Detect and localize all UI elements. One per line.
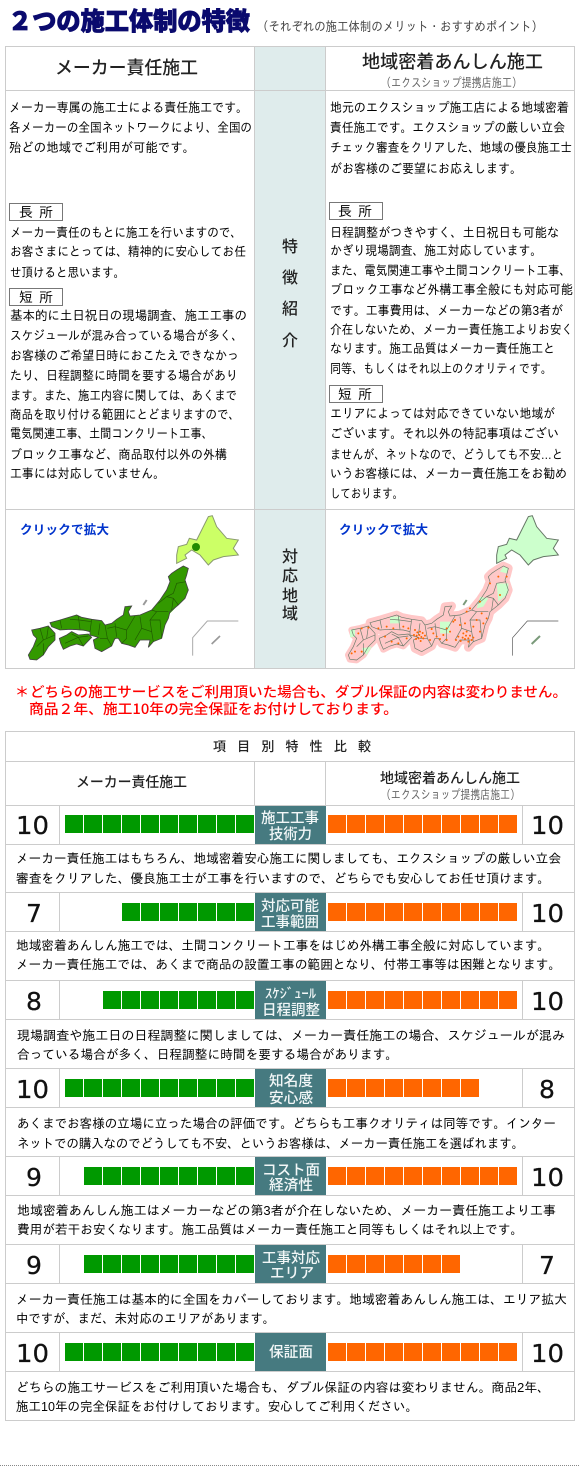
text block: cost: 費用が若干お安くなります。施工品質はメーカー責任施工と同等もしくはそれ以上です。 [17, 1222, 523, 1237]
text block: maker merit: お客さまにとっては、精神的に安心してお任 [10, 244, 246, 259]
text block: maker demerit: お客様のご希望日時におこたえできなかっ [10, 348, 239, 363]
text block: construction skill [16, 851, 561, 886]
text block: construction skill: メーカー責任施工はもちろん、地域密着安心施工に関しましても、エクスショップの厳しい立会 [16, 851, 561, 866]
text block: work range [16, 938, 561, 972]
badge: maker merit: 長 所 [19, 204, 53, 220]
badge: local demerit: 短 所 [338, 386, 372, 402]
text block: maker demerit: スケジュールが混み合っている場合が多く、 [10, 328, 243, 343]
row: cost: 10 [531, 1163, 564, 1192]
row: name recognition [16, 1069, 555, 1108]
text block: local merit: 日程調整がつきやすく、土日祝日も可能な [330, 225, 559, 240]
badge: local demerit [330, 386, 382, 402]
row: work range: 7 [26, 899, 42, 928]
row: warranty: 10 [531, 1339, 564, 1368]
callout: guarantee note: ＊ [15, 682, 29, 702]
row: service area: エリア [270, 1262, 314, 1283]
badge: maker merit [10, 204, 62, 220]
vertical label: coverage [282, 543, 298, 624]
text block: maker demerit: 基本的に土日祝日の現場調査、施工工事の [10, 308, 247, 323]
text block: name recognition: ネットでの購入なのでどうしても不安、というお客様は、メーカー責任施工を選ばれます。 [17, 1136, 524, 1151]
panel: features table [6, 46, 574, 668]
text block: work range: メーカー責任施工では、あくまで商品の設置工事の範囲となり、付帯工事等は困難となります。 [16, 957, 561, 972]
table heading: 項目別特性比較 [213, 736, 371, 755]
row: warranty: 10 [16, 1339, 49, 1368]
row: cost: 9 [26, 1163, 42, 1192]
text block: maker demerit: 商品を取り付ける範囲にとどまりますので、 [10, 407, 240, 422]
text block: maker intro [9, 100, 252, 155]
map: local coverage [348, 516, 558, 660]
text block: schedule [17, 1028, 565, 1062]
badge: local merit: 長 所 [338, 203, 372, 219]
callout: guarantee note: 商品２年、施工10年の完全保証をお付けしております。 [29, 699, 398, 719]
row: work range [26, 893, 564, 932]
text block: name recognition [17, 1116, 556, 1151]
text block: service area: メーカー責任施工は基本的に全国をカバーしております。地域密着あんしん施工は、エリア拡大 [16, 1292, 567, 1307]
text block: maker demerit: ます。また、施工内容に関しては、あくまで [10, 388, 237, 403]
text block: service area [16, 1292, 567, 1326]
badge: local merit [330, 202, 382, 220]
text block: local intro: がお客様のご要望にお応えします。 [330, 161, 522, 176]
text block: maker demerit: たり、日程調整に時間を要する場合があり [10, 368, 238, 383]
column heading: maker: メーカー責任施工 [76, 772, 187, 792]
heading: local: 地域密着あんしん施工 [362, 48, 543, 74]
text block: local merit: です。工事費用は、メーカーなどの第3者が [330, 303, 563, 318]
row: construction skill: 施工工事 [261, 807, 319, 828]
vertical label: features: 紹 [282, 295, 298, 319]
text block: cost: 地域密着あんしん施工はメーカーなどの第3者が介在しないため、メーカー責任施工より工事 [17, 1203, 556, 1218]
row: cost: 経済性 [269, 1174, 313, 1195]
row: schedule [26, 981, 564, 1020]
text block: maker intro: メーカー専属の施工士による責任施工です。 [9, 100, 248, 115]
row: construction skill: 10 [16, 811, 49, 840]
subtitle: （それぞれの施工体制のメリット・おすすめポイント） [257, 19, 543, 34]
vertical label: features: 徴 [282, 264, 298, 288]
text block: maker demerit: 工事には対応していません。 [10, 466, 165, 481]
map: maker coverage [28, 516, 238, 660]
heading note: local: （エクスショップ提携店施工） [381, 76, 522, 90]
text block: name recognition: あくまでお客様の立場に立った場合の評価です。どちらも工事クオリティは同等です。インター [17, 1116, 556, 1131]
row: warranty [16, 1333, 564, 1371]
row: work range: 工事範囲 [261, 911, 319, 932]
panel: comparison table [6, 732, 574, 1420]
row: work range: 対応可能 [261, 895, 319, 916]
text block: local demerit: エリアによっては対応できていない地域が [330, 406, 555, 421]
vertical label: features: 特 [282, 233, 298, 257]
text block: maker intro: 各メーカーの全国ネットワークにより、全国の [9, 120, 252, 135]
title: ２つの施工体制の特徴 [8, 2, 250, 38]
text block: construction skill: 審査をクリアした、優良施工士が工事を行いますので、どちらでも安心してお任せ頂けます。 [16, 871, 550, 886]
vertical label: coverage: 域 [282, 600, 298, 624]
row: service area [26, 1245, 555, 1283]
row: service area: 工事対応 [262, 1247, 320, 1268]
text block: maker demerit: 電気関連工事、土間コンクリート工事、 [10, 426, 213, 441]
text block: warranty: どちらの施工サービスをご利用頂いた場合も、ダブル保証の内容は変わりません。商品2年、 [16, 1380, 550, 1395]
text block: service area: 中ですが、まだ、未対応のエリアがあります。 [16, 1311, 275, 1326]
row: name recognition: 知名度 [269, 1070, 313, 1091]
heading: maker: メーカー責任施工 [55, 54, 198, 80]
text block: maker intro: 殆どの地域でご利用が可能です。 [9, 140, 195, 155]
vertical label: coverage: 対 [282, 543, 298, 567]
text block: schedule: 合っている場合が多く、日程調整に時間を要する場合があります。 [17, 1047, 398, 1062]
row: construction skill: 10 [531, 811, 564, 840]
callout: guarantee note [15, 682, 567, 719]
row: schedule: ｽｹｼﾞｭｰﾙ [265, 983, 317, 1002]
row: service area: 9 [26, 1251, 42, 1280]
row: service area: 7 [539, 1251, 555, 1280]
row: schedule: 8 [26, 987, 42, 1016]
text block: cost [17, 1203, 556, 1237]
vertical label: coverage: 地 [282, 582, 298, 606]
callout: guarantee note: どちらの施工サービスをご利用頂いた場合も、ダブル保証の内容は変わりません。 [30, 682, 567, 702]
link text: maker map: クリックで拡大 [20, 519, 109, 538]
text block: local merit [330, 225, 573, 376]
vertical label: features [282, 233, 298, 351]
text block: local demerit: ございます。それ以外の特記事項はござい [330, 426, 559, 441]
row: name recognition: 安心感 [269, 1087, 314, 1108]
text block: schedule: 現場調査や施工日の日程調整に関しましては、メーカー責任施工の場合、スケジュールが混み [17, 1028, 565, 1043]
column heading note: local: （エクスショップ提携店施工） [381, 788, 520, 802]
text block: warranty [16, 1380, 550, 1414]
column heading: local: 地域密着あんしん施工 [380, 768, 520, 788]
row: work range: 10 [531, 899, 564, 928]
row: cost: コスト面 [262, 1159, 320, 1180]
text block: local merit: かぎり現場調査、施工対応しています。 [330, 243, 542, 258]
text block: work range: 地域密着あんしん施工では、土間コンクリート工事をはじめ外構工事全般に対応しています。 [16, 938, 550, 953]
text block: warranty: 施工10年の完全保証をお付けしております。安心してご利用ください。 [16, 1399, 418, 1414]
text block: maker merit: メーカー責任のもとに施工を行いますので、 [10, 225, 242, 240]
text block: local demerit: しております。 [330, 486, 403, 501]
row: schedule: 10 [531, 987, 564, 1016]
badge: maker demerit: 短 所 [19, 289, 53, 305]
text block: local merit: なります。施工品質はメーカー責任施工と [330, 341, 555, 356]
row: name recognition: 10 [16, 1075, 49, 1104]
vertical label: features: 介 [282, 327, 298, 351]
row: warranty: 保証面 [269, 1341, 313, 1362]
text block: maker merit [10, 225, 246, 280]
vertical label: coverage: 応 [282, 562, 298, 586]
text block: maker demerit [10, 308, 247, 481]
row: name recognition: 8 [539, 1075, 555, 1104]
row: cost [26, 1157, 564, 1195]
link text: local map: クリックで拡大 [339, 519, 428, 538]
text block: maker merit: せ頂けると思います。 [10, 265, 125, 280]
row: construction skill [16, 806, 564, 844]
row: schedule: 日程調整 [262, 999, 320, 1020]
row: construction skill: 技術力 [269, 823, 312, 844]
text block: local demerit [330, 406, 567, 501]
badge: maker demerit [10, 288, 62, 306]
text block: local intro [330, 100, 572, 176]
text block: maker demerit: ブロック工事など、商品取付以外の外構 [10, 447, 227, 462]
